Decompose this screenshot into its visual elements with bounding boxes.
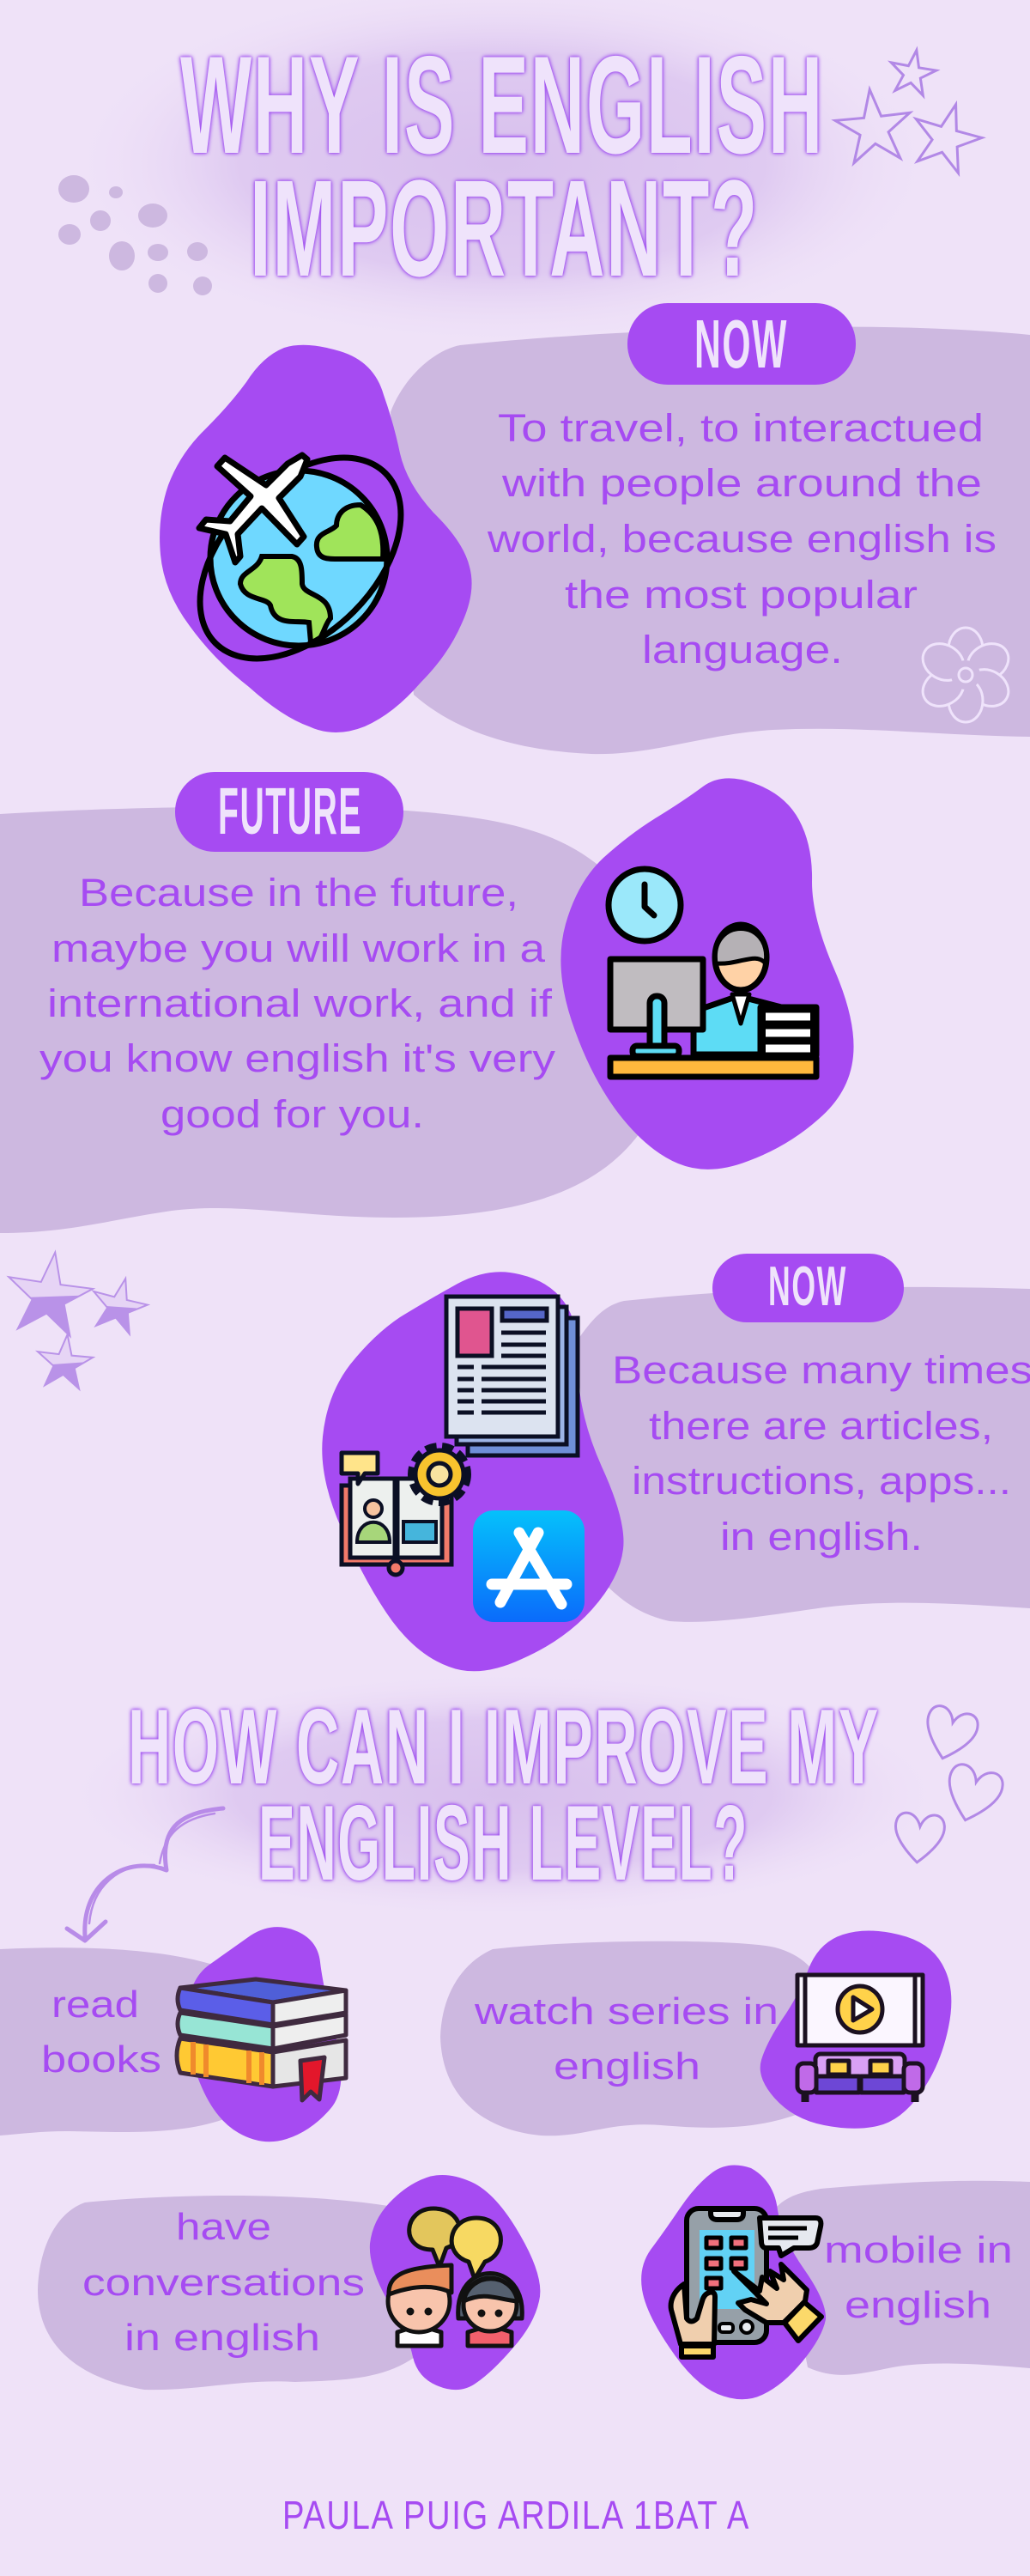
panel: read books (0, 1927, 346, 2142)
icon: open book with gear (342, 1449, 465, 1575)
text: mobile (824, 2229, 1013, 2326)
text: travel: To travel, to interactued (498, 406, 984, 450)
icon: phone with hands (671, 2208, 821, 2357)
text: mobile: mobile in (824, 2229, 1013, 2271)
text: watch series: english (554, 2045, 700, 2087)
icon: books (177, 1979, 346, 2100)
pill: now (627, 303, 856, 385)
icon: hearts (893, 1704, 1006, 1864)
text: apps: Because many times (612, 1348, 1030, 1392)
pill: future: FUTURE (218, 775, 362, 848)
panel: now travel (160, 303, 1030, 754)
panel: apps and articles (322, 1254, 1030, 1671)
panel background (440, 1941, 815, 2136)
text: future (39, 871, 556, 1136)
icon: scribbled stars (2, 1247, 153, 1390)
title (180, 27, 824, 305)
heading: how can I improve (128, 1688, 880, 1903)
text: conversations (82, 2206, 365, 2359)
icon: flower (916, 628, 1015, 722)
footer: author: PAULA PUIG ARDILA 1BAT A (282, 2493, 750, 2537)
purple blob (160, 345, 472, 732)
panel: conversations (38, 2175, 540, 2390)
text: travel (487, 406, 997, 671)
pill: future (175, 772, 403, 852)
pill: now: NOW (768, 1255, 847, 1317)
panel background (575, 1287, 1030, 1622)
pill: now (712, 1254, 904, 1322)
text: watch series (474, 1990, 779, 2087)
panel: watch series (440, 1930, 951, 2136)
purple blob (322, 1272, 623, 1671)
panel background (0, 806, 639, 1233)
text: mobile: english (845, 2284, 991, 2326)
icon: office worker (609, 869, 816, 1077)
purple blob (560, 778, 854, 1170)
decorative dots (58, 175, 212, 295)
text: travel: world, because english is (487, 517, 997, 561)
text: future: Because in the future, (79, 871, 518, 914)
icon: outline stars top right (833, 46, 989, 177)
text: read books: read (52, 1984, 139, 2026)
text: future: good for you. (161, 1092, 424, 1136)
text: read books (41, 1984, 161, 2081)
text: apps: there are articles, (649, 1404, 993, 1448)
text: conversations: conversations (82, 2262, 365, 2304)
panel background (0, 1947, 240, 2136)
icon: globe and plane (162, 420, 439, 696)
text: apps (612, 1348, 1030, 1558)
text: travel: the most popular (565, 573, 918, 617)
text: apps: instructions, apps... (632, 1459, 1011, 1503)
text: conversations: have (176, 2206, 271, 2248)
text: future: maybe you will work in a (52, 927, 546, 970)
pill: now: NOW (694, 306, 788, 382)
panel background (38, 2196, 421, 2390)
icon: tv and couch (797, 1975, 923, 2102)
text: read books: books (41, 2038, 161, 2081)
text: travel: language. (642, 628, 843, 671)
text: watch series: watch series in (474, 1990, 779, 2032)
panel background (391, 326, 1030, 754)
purple blob (641, 2165, 826, 2399)
arrow (67, 1808, 223, 1941)
purple blob (760, 1930, 951, 2129)
purple blob (187, 1927, 342, 2142)
purple blob (370, 2175, 540, 2390)
icon: newspaper (446, 1297, 578, 1455)
text: future: you know english it's very (39, 1036, 556, 1080)
panel: future work (0, 772, 854, 1233)
text: apps: in english. (720, 1515, 923, 1558)
text: travel: with people around the (501, 461, 982, 505)
panel: mobile (641, 2165, 1030, 2399)
panel background (777, 2181, 1030, 2375)
icon: two people talking (388, 2208, 522, 2346)
text: conversations: in english (124, 2317, 320, 2359)
text: future: international work, and if (47, 981, 553, 1025)
icon: app store (473, 1510, 585, 1622)
